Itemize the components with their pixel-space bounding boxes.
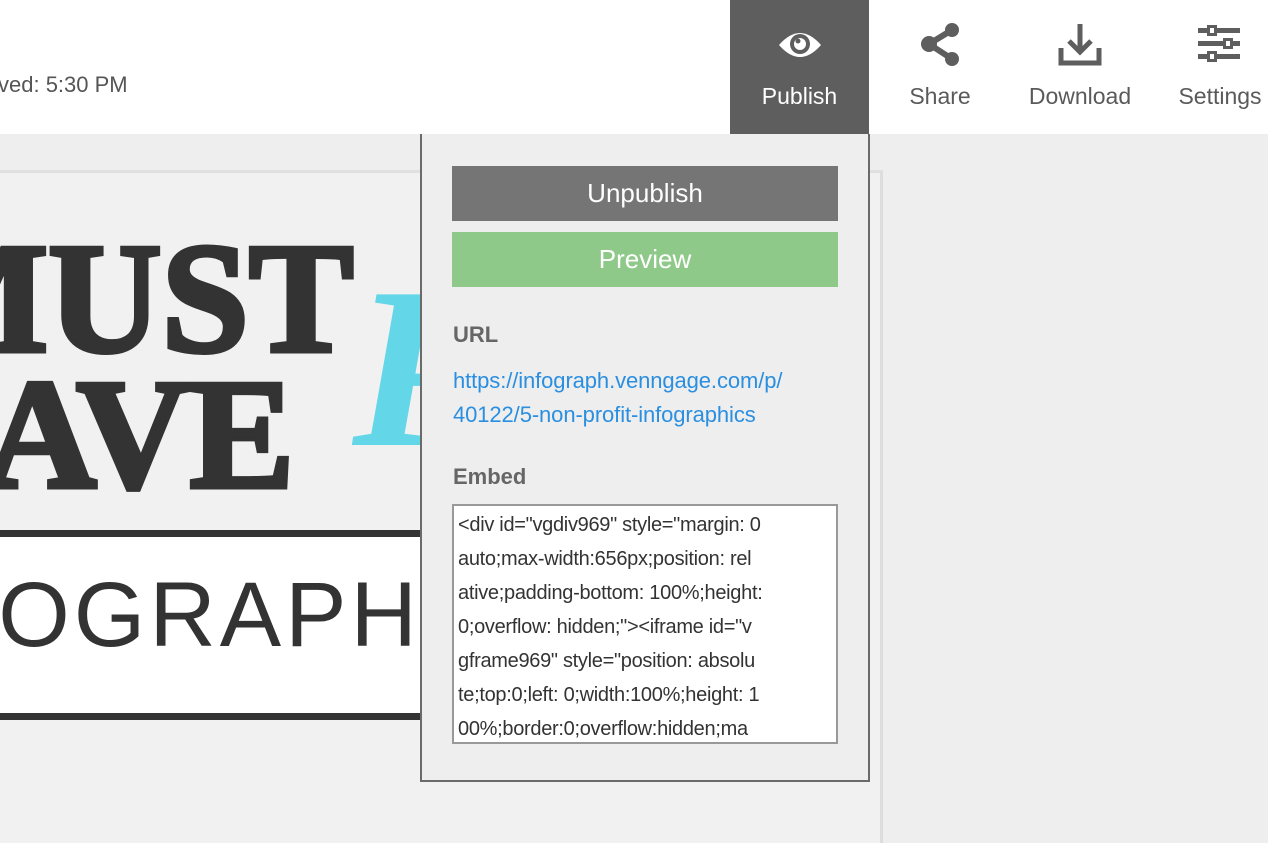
preview button — [452, 232, 838, 287]
URL label: URL — [453, 322, 498, 347]
embed code box: te;top:0;left: 0;width:100%;height: 1 — [458, 684, 759, 706]
settings: Settings — [1178, 83, 1262, 109]
settings — [1178, 25, 1262, 109]
unpublish button — [452, 166, 838, 221]
embed code box: 0;overflow: hidden;"><iframe id="v — [458, 616, 752, 638]
icon: eye — [779, 33, 821, 57]
embed code box: <div id="vgdiv969" style="margin: 0 — [458, 514, 761, 536]
infographic canvas — [0, 170, 883, 843]
embed code box: gframe969" style="position: absolu — [458, 650, 755, 672]
embed code box: 00%;border:0;overflow:hidden;ma — [458, 718, 748, 740]
Embed label: Embed — [453, 464, 526, 489]
icon: share — [921, 23, 959, 66]
saved status: ved: 5:30 PM — [0, 72, 128, 97]
URL link — [453, 368, 782, 427]
embed code box: auto;max-width:656px;position: rel — [458, 548, 751, 570]
unpublish button: Unpublish — [587, 178, 703, 208]
publish tab — [730, 0, 869, 134]
URL link: 40122/5-non-profit-infographics — [453, 402, 756, 427]
download — [1029, 24, 1131, 109]
share: Share — [909, 83, 971, 109]
embed code box — [452, 504, 838, 744]
embed code box: ative;padding-bottom: 100%;height: — [458, 582, 762, 604]
script word: P — [352, 240, 492, 495]
icon: download — [1058, 24, 1102, 66]
publish tab: Publish — [762, 83, 837, 109]
download: Download — [1029, 83, 1131, 109]
preview button: Preview — [599, 244, 691, 274]
share — [909, 23, 971, 109]
URL link: https://infograph.venngage.com/p/ — [453, 368, 782, 393]
top bar — [0, 0, 1268, 134]
publish popup — [420, 134, 870, 782]
icon: sliders — [1198, 25, 1240, 62]
subtitle band — [0, 530, 421, 720]
